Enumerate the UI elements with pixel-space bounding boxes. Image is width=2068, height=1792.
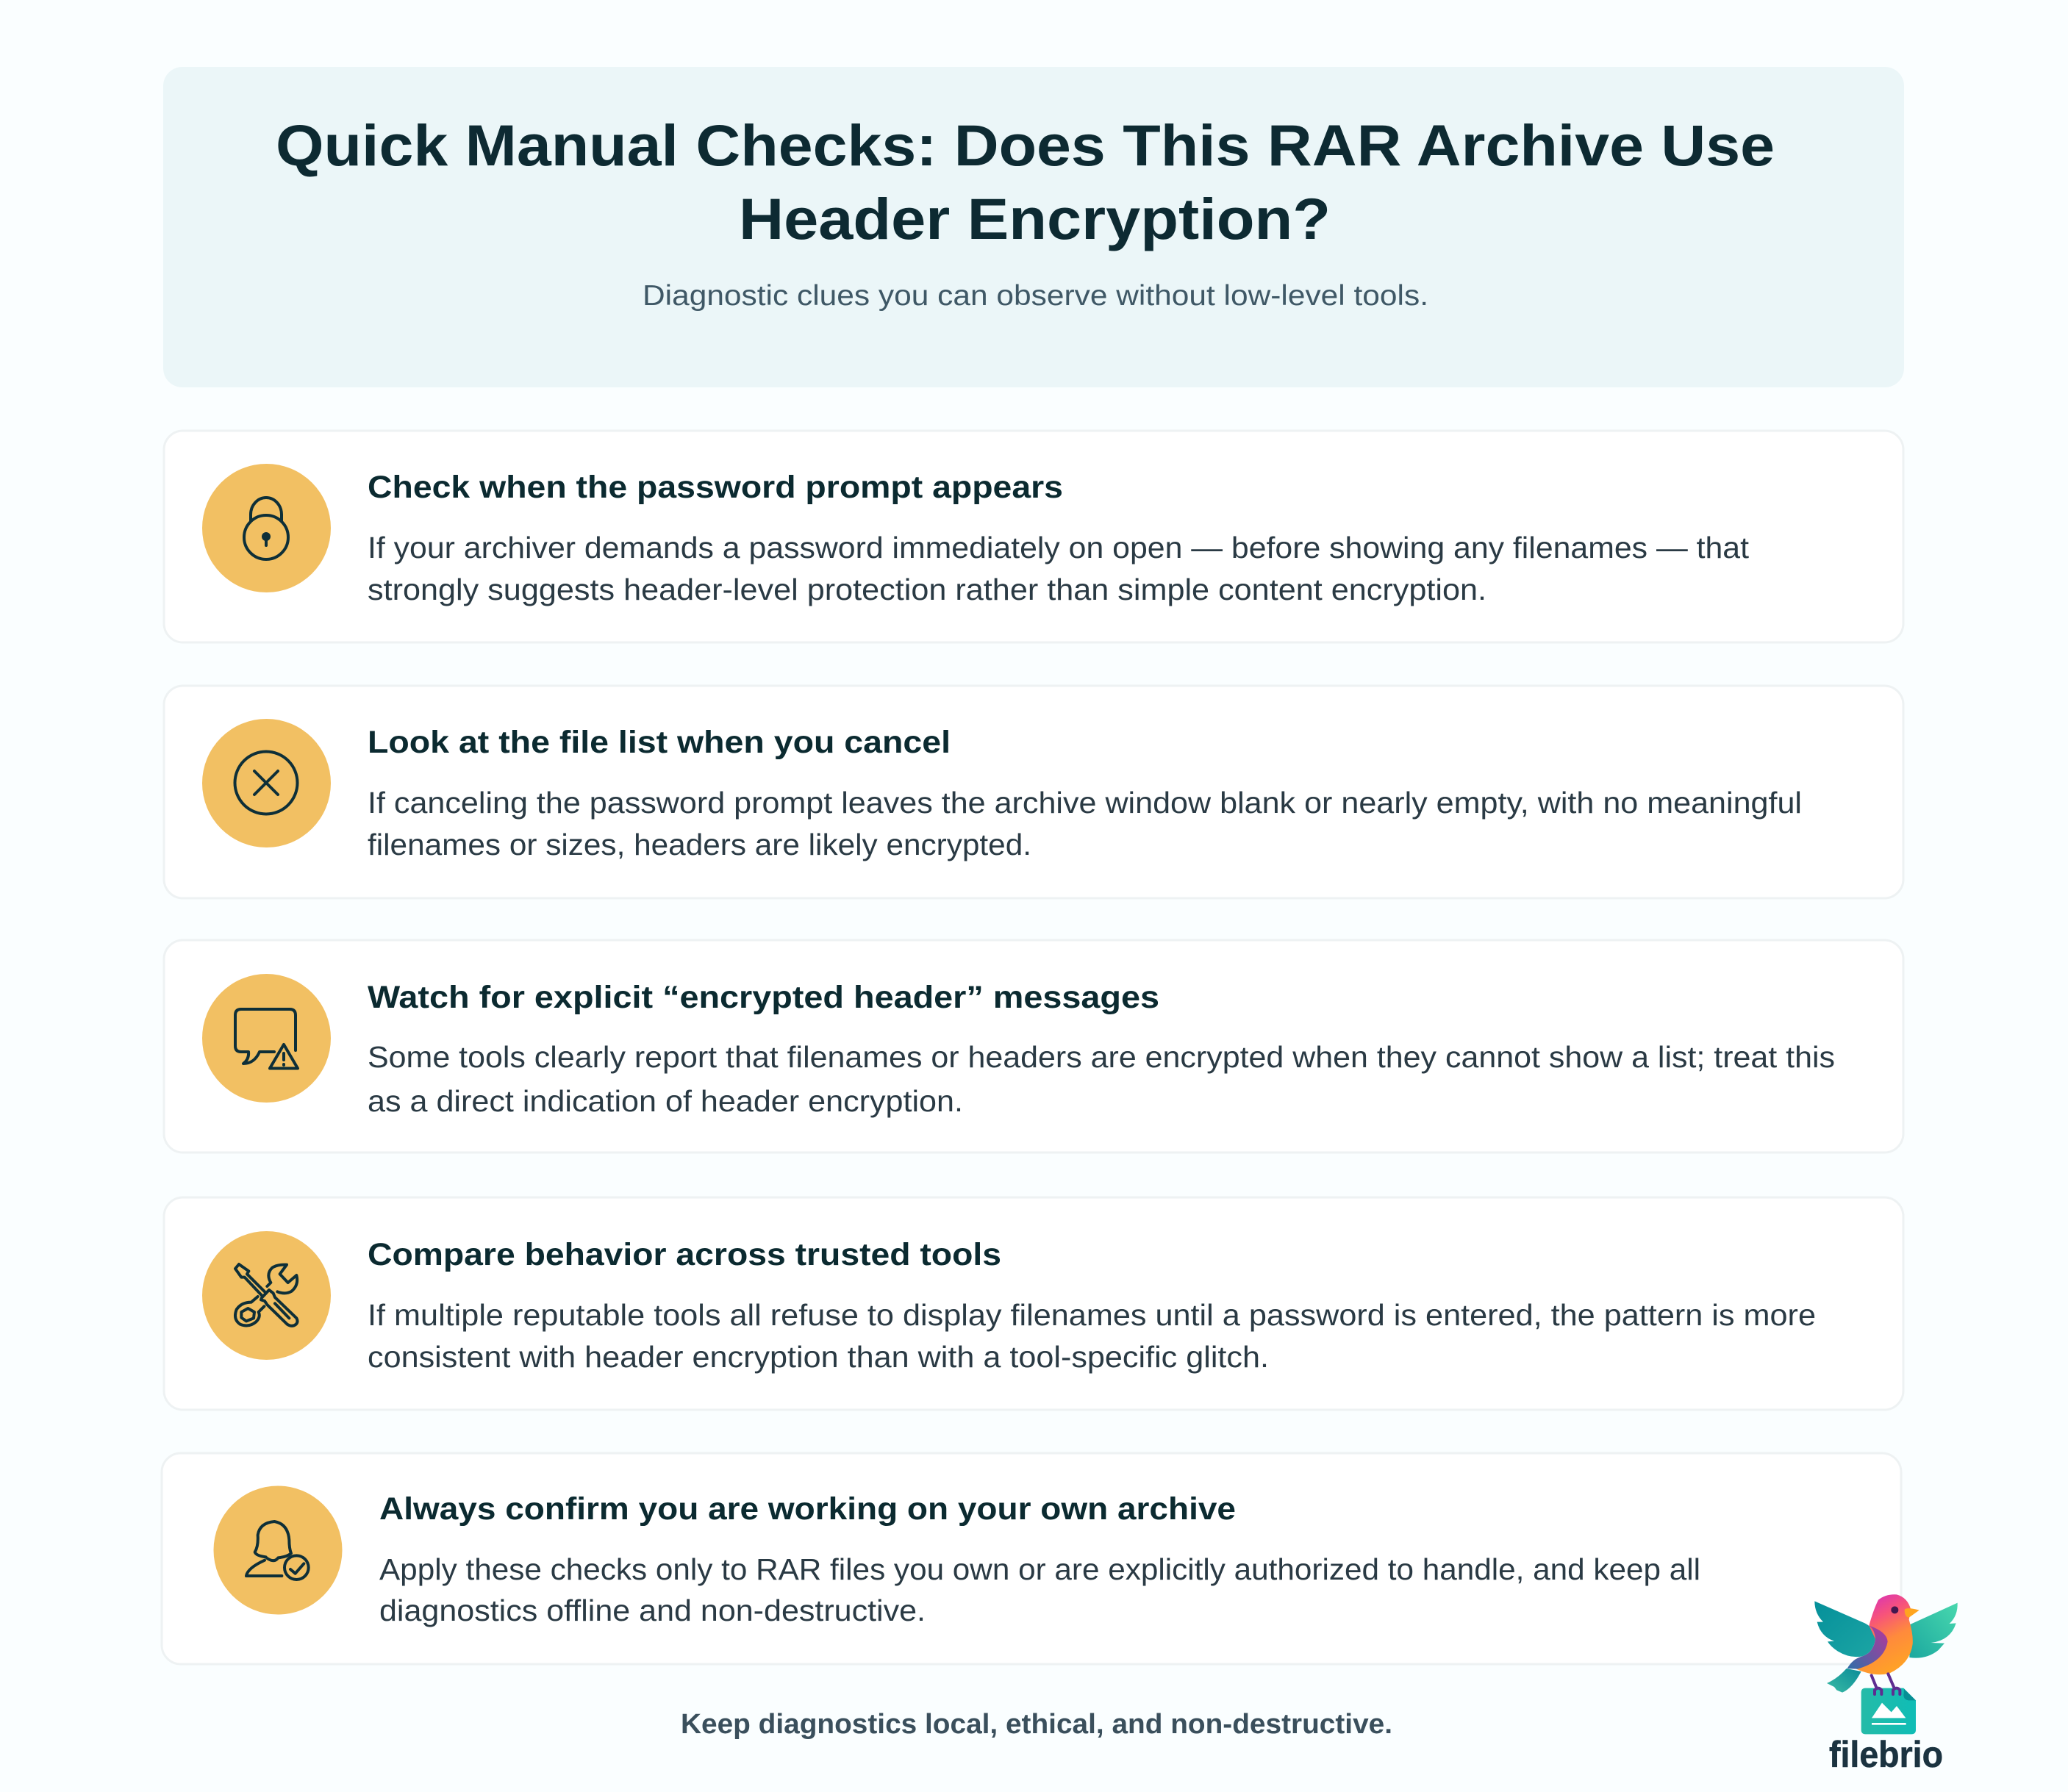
footer note: Keep diagnostics local, ethical, and non-destructive.: [681, 1709, 1392, 1740]
body text: Some tools clearly report that filenames or headers are encrypted when they cannot show a list; treat this: [368, 1040, 1835, 1074]
panel: check 1 password prompt: [164, 431, 1903, 642]
body text: [368, 786, 1802, 861]
heading: Watch for explicit “encrypted header” messages: [368, 980, 1159, 1015]
title: [276, 112, 1775, 251]
subtitle: Diagnostic clues you can observe without low-level tools.: [643, 280, 1428, 312]
body text: filenames or sizes, headers are likely encrypted.: [368, 828, 1031, 861]
body text: [368, 1298, 1816, 1374]
header background: [163, 67, 1904, 387]
body text: If multiple reputable tools all refuse to display filenames until a password is entered, the pattern is more: [368, 1298, 1816, 1332]
panel: check 5 own archive: [162, 1453, 1901, 1664]
icon: padlock: [202, 464, 331, 592]
heading: Check when the password prompt appears: [368, 470, 1063, 505]
title: Quick Manual Checks: Does This RAR Archive Use: [276, 112, 1775, 178]
icon: file: [1861, 1688, 1916, 1734]
body text: [368, 531, 1749, 606]
heading: Compare behavior across trusted tools: [368, 1237, 1001, 1272]
logo: filebrio bird: [1814, 1594, 1958, 1775]
panel: check 3 messages: [164, 940, 1903, 1153]
title: Header Encryption?: [739, 186, 1331, 251]
card background: [164, 1197, 1903, 1410]
body text: Apply these checks only to RAR files you own or are explicitly authorized to handle, and keep all: [379, 1552, 1700, 1586]
card background: [164, 940, 1903, 1153]
body text: If canceling the password prompt leaves the archive window blank or nearly empty, with no meaningful: [368, 786, 1802, 820]
logo wordmark: filebrio: [1829, 1734, 1943, 1775]
body text: diagnostics offline and non-destructive.: [379, 1594, 926, 1627]
card background: [164, 431, 1903, 642]
card background: [162, 1453, 1901, 1664]
body text: [368, 1040, 1835, 1118]
panel: check 4 trusted tools: [164, 1197, 1903, 1410]
body text: [379, 1552, 1700, 1627]
icon: chat bubble with warning: [202, 974, 331, 1103]
panel: header: [163, 67, 1904, 387]
icon: wrench and screwdriver: [202, 1231, 331, 1360]
card background: [164, 686, 1903, 898]
icon: person with check: [213, 1486, 343, 1614]
body text: as a direct indication of header encryption.: [368, 1084, 963, 1118]
body text: consistent with header encryption than with a tool-specific glitch.: [368, 1340, 1269, 1374]
heading: Look at the file list when you cancel: [368, 725, 951, 760]
panel: check 2 file list: [164, 686, 1903, 898]
heading: Always confirm you are working on your own archive: [379, 1491, 1236, 1527]
icon: bird: [1814, 1594, 1958, 1694]
body text: If your archiver demands a password immediately on open — before showing any filenames — that: [368, 531, 1749, 565]
body text: strongly suggests header-level protection rather than simple content encryption.: [368, 573, 1486, 606]
icon: circled x: [202, 719, 331, 847]
